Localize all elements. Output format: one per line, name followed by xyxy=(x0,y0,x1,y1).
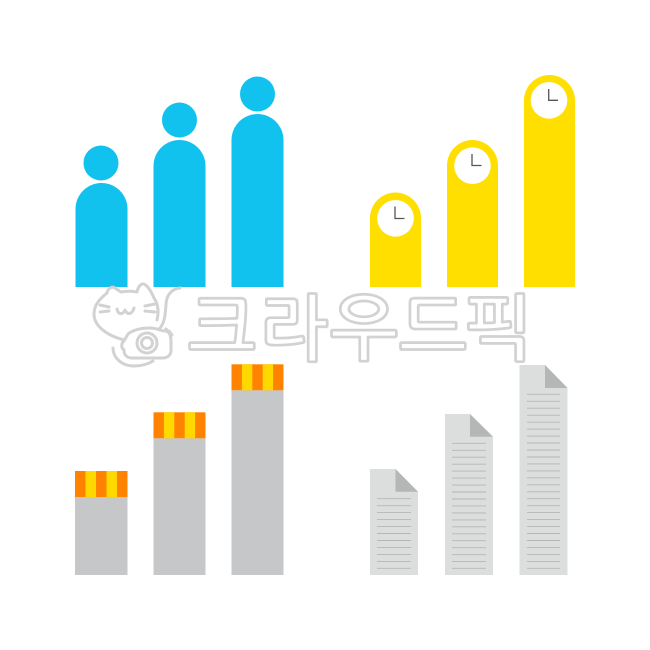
person bar large xyxy=(232,76,284,287)
watermark: brand name: 드 xyxy=(399,290,467,370)
watermark: brand name: 픽 xyxy=(465,290,533,370)
camera lens xyxy=(137,333,157,353)
cat tail xyxy=(113,348,153,366)
panel: document bar chart xyxy=(370,365,568,575)
panel: blue people bar chart xyxy=(76,76,284,287)
watermark: brand name xyxy=(188,290,533,370)
person bar medium xyxy=(154,102,206,287)
clock bar small xyxy=(370,193,421,287)
person bar small xyxy=(76,146,128,287)
watermark: cat with camera logo xyxy=(94,284,180,366)
striped bar small xyxy=(75,471,128,575)
panel: yellow clock bar chart xyxy=(370,75,575,287)
watermark: brand name: 크 xyxy=(188,290,256,370)
clock bar medium xyxy=(447,140,498,287)
document medium xyxy=(445,414,493,575)
cat head xyxy=(94,284,158,340)
camera strap xyxy=(160,288,180,335)
document small xyxy=(370,469,418,575)
watermark: brand name: 우 xyxy=(330,290,398,370)
striped bar large xyxy=(232,364,284,575)
clock bar large xyxy=(524,75,575,287)
panel: gray bars with striped caps xyxy=(75,364,284,575)
cat face xyxy=(100,304,155,314)
striped bar medium xyxy=(154,412,206,575)
camera body xyxy=(122,328,171,358)
watermark: brand name: 라 xyxy=(260,290,328,370)
document large xyxy=(520,365,568,575)
